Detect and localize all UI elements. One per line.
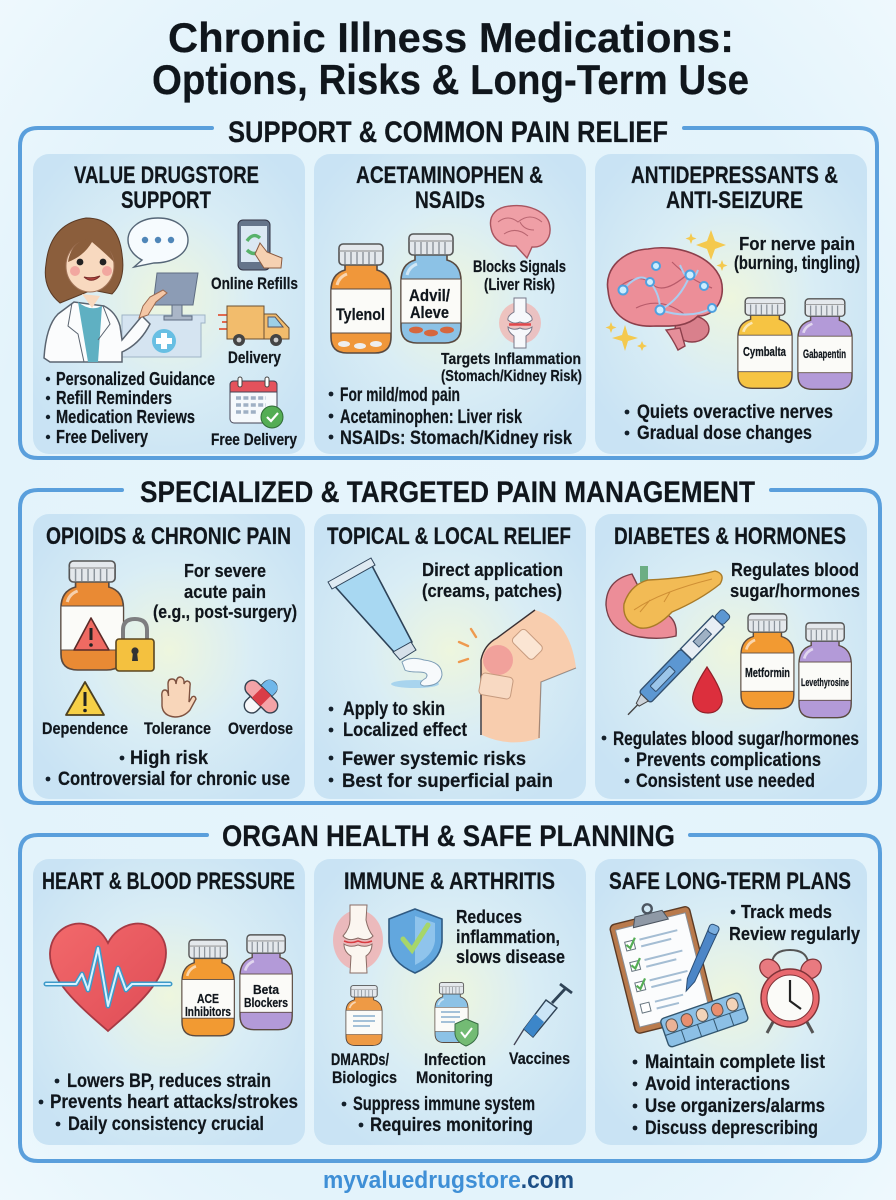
- bullet list: Refill Reminders: [56, 387, 172, 408]
- panel heading: [356, 162, 543, 214]
- icon: Gabapentin bottle: [798, 299, 852, 389]
- bullet list: Use organizers/alarms: [645, 1096, 825, 1117]
- bullet list: [46, 368, 215, 447]
- icon: overdose pills: [241, 677, 281, 716]
- bullet list: [625, 402, 833, 444]
- icon: Levothyroxine bottle: [799, 623, 851, 718]
- bullet list: [39, 1071, 298, 1135]
- bullet list: Consistent use needed: [636, 771, 815, 792]
- label: infection monitoring: Infection: [424, 1051, 486, 1069]
- icon: beta blockers bottle: Beta: [253, 982, 280, 997]
- label: targets inflammation: (Stomach/Kidney Risk): [441, 368, 582, 385]
- icon: Tylenol bottle: Tylenol: [336, 305, 385, 324]
- bullet list: Controversial for chronic use: [58, 769, 290, 790]
- panel heading: NSAIDs: [415, 187, 485, 214]
- icon: brain: [490, 206, 550, 258]
- footer url: myvaluedrugstore.com: [323, 1167, 574, 1194]
- label: delivery: Delivery: [228, 349, 282, 367]
- icon: pill organizer: [660, 992, 749, 1048]
- panel heading: HEART & BLOOD PRESSURE: [42, 868, 295, 895]
- label: tolerance: Tolerance: [144, 720, 211, 738]
- label: blocks signals: [473, 258, 566, 294]
- icon: blood drop: [693, 667, 722, 713]
- panel heading: IMMUNE & ARTHRITIS: [344, 868, 555, 895]
- panel: acetaminophen and NSAIDs: [314, 154, 586, 454]
- label: reduces inflammation: Reduces: [456, 906, 522, 927]
- bullet list: [329, 385, 572, 449]
- icon: Advil and Aleve bottle: Aleve: [410, 303, 449, 322]
- section: organ health and safe planning: [20, 820, 880, 1161]
- icon: brain with nerve signals: [607, 248, 722, 350]
- icon: calendar with check: [230, 377, 283, 428]
- label: reduces inflammation: slows disease: [456, 946, 565, 967]
- icon: tolerance hand: [162, 677, 196, 717]
- bullet list: Personalized Guidance: [56, 368, 215, 389]
- icon: knee with patches: [478, 610, 576, 742]
- label: direct application: [422, 559, 563, 601]
- bullet list: [633, 1052, 826, 1139]
- icon: delivery truck: [218, 306, 289, 346]
- icon: inflamed knee joint: [333, 905, 383, 973]
- bullet list: Medication Reviews: [56, 406, 195, 427]
- label: nerve pain: (burning, tingling): [734, 252, 860, 273]
- bullet list: [602, 729, 859, 792]
- label: regulates blood sugar: sugar/hormones: [730, 580, 860, 601]
- icon: sparkles: [606, 230, 728, 351]
- label: free delivery: Free Delivery: [211, 431, 298, 449]
- section: specialized and targeted pain management: [20, 476, 880, 803]
- bullet list: High risk: [130, 748, 208, 769]
- label: track meds: Track meds: [741, 901, 832, 922]
- panel heading: VALUE DRUGSTORE: [74, 162, 259, 189]
- panel heading: [74, 162, 259, 214]
- icon: Metformin bottle: [741, 614, 794, 709]
- icon: pancreas: [606, 566, 722, 638]
- bullet list: For mild/mod pain: [340, 385, 460, 406]
- bullet list: [329, 699, 553, 792]
- label: overdose: Overdose: [228, 720, 293, 738]
- title: [152, 14, 749, 103]
- bullet list: [342, 1094, 535, 1136]
- label: severe acute pain: (e.g., post-surgery): [153, 601, 297, 622]
- icon: heart with pulse: [46, 924, 170, 1031]
- label: DMARDs and biologics: [331, 1051, 397, 1087]
- bullet list: Best for superficial pain: [342, 771, 553, 792]
- label: regulates blood sugar: Regulates blood: [731, 559, 859, 580]
- bullet list: Free Delivery: [56, 426, 149, 447]
- panel: diabetes and hormones: [595, 514, 867, 799]
- panel: heart and blood pressure: [33, 859, 305, 1145]
- icon: clipboard checklist: [606, 895, 716, 1034]
- bullet list: Daily consistency crucial: [68, 1114, 264, 1135]
- icon: monitoring bottle with shield: [435, 983, 478, 1046]
- label: vaccines: Vaccines: [509, 1050, 570, 1068]
- bullet list: Prevents heart attacks/strokes: [50, 1092, 298, 1113]
- bullet list: Gradual dose changes: [637, 423, 812, 444]
- label: nerve pain: [734, 233, 860, 273]
- panel: safe long-term plans: [595, 859, 867, 1145]
- panel: immune and arthritis: [314, 859, 586, 1145]
- label: track meds: Review regularly: [729, 923, 861, 944]
- panel heading: ANTI-SEIZURE: [666, 187, 803, 214]
- label: severe acute pain: For severe: [184, 560, 266, 581]
- label: blocks signals: Blocks Signals: [473, 258, 566, 276]
- icon: inflamed joint: [499, 298, 541, 348]
- icon: Advil and Aleve bottle: [401, 234, 461, 343]
- section heading: SPECIALIZED & TARGETED PAIN MANAGEMENT: [140, 476, 755, 509]
- icon: pen: [682, 923, 720, 993]
- label: infection monitoring: Monitoring: [416, 1069, 493, 1087]
- bullet list: Discuss deprescribing: [645, 1118, 818, 1139]
- label: infection monitoring: [416, 1051, 493, 1087]
- bullet list: Localized effect: [343, 720, 468, 741]
- label: direct application: Direct application: [422, 559, 563, 580]
- label: regulates blood sugar: [730, 559, 860, 601]
- icon: ACE inhibitors bottle: ACE: [197, 991, 219, 1006]
- section heading: SUPPORT & COMMON PAIN RELIEF: [228, 116, 668, 149]
- panel heading: ACETAMINOPHEN &: [356, 162, 543, 189]
- icon: DMARD bottle: [346, 986, 382, 1046]
- label: nerve pain: For nerve pain: [739, 233, 855, 254]
- bullet list: Fewer systemic risks: [342, 749, 526, 770]
- bullet list: Quiets overactive nerves: [637, 402, 833, 423]
- panel: topical and local relief: [314, 514, 586, 799]
- icon: vaccine syringe: [514, 984, 572, 1045]
- panel heading: [631, 162, 838, 214]
- section: support and common pain relief: [20, 116, 877, 458]
- title: Options, Risks & Long-Term Use: [152, 56, 749, 103]
- icon: pharmacist at counter: [44, 218, 205, 362]
- label: reduces inflammation: inflammation,: [456, 926, 560, 947]
- panel: opioids and chronic pain: [33, 514, 305, 799]
- icon: Levothyroxine bottle: Levethyrosine: [801, 677, 849, 689]
- panel heading: ANTIDEPRESSANTS &: [631, 162, 838, 189]
- panel heading: TOPICAL & LOCAL RELIEF: [327, 523, 571, 550]
- bullet list: Lowers BP, reduces strain: [67, 1071, 271, 1092]
- icon: dependence warning: [66, 682, 104, 715]
- bullet list: NSAIDs: Stomach/Kidney risk: [340, 428, 572, 449]
- bullet list: Prevents complications: [636, 750, 821, 771]
- icon: opioid bottle with warning and lock: [61, 561, 154, 671]
- bullet list: Apply to skin: [343, 699, 445, 720]
- label: severe acute pain: [153, 560, 297, 622]
- label: online refills: Online Refills: [211, 275, 298, 293]
- icon: ACE inhibitors bottle: [182, 940, 234, 1036]
- icon: speech bubble: [128, 218, 188, 267]
- panel heading: OPIOIDS & CHRONIC PAIN: [46, 523, 291, 550]
- label: track meds: [729, 901, 861, 944]
- icon: insulin pen: [622, 607, 732, 720]
- bullet list: Requires monitoring: [370, 1115, 533, 1136]
- icon: Gabapentin bottle: Gabapentin: [803, 349, 846, 361]
- icon: Cymbalta bottle: [738, 298, 792, 388]
- icon: beta blockers bottle: Blockers: [244, 995, 288, 1010]
- section heading: ORGAN HEALTH & SAFE PLANNING: [222, 820, 675, 853]
- panel heading: SUPPORT: [121, 187, 211, 214]
- bullet list: Maintain complete list: [645, 1052, 826, 1073]
- label: blocks signals: (Liver Risk): [484, 276, 555, 294]
- icon: phone refills: [238, 220, 282, 270]
- icon: beta blockers bottle: [240, 935, 292, 1030]
- label: targets inflammation: Targets Inflammation: [441, 351, 581, 368]
- label: dependence: Dependence: [42, 720, 128, 738]
- panel: value drugstore support: [33, 154, 305, 454]
- bullet list: Avoid interactions: [645, 1074, 790, 1095]
- label: direct application: (creams, patches): [422, 580, 562, 601]
- icon: alarm clock: [756, 950, 825, 1033]
- label: severe acute pain: acute pain: [184, 581, 266, 602]
- bullet list: [46, 748, 290, 790]
- bullet list: Acetaminophen: Liver risk: [340, 407, 522, 428]
- icon: shield with check: [389, 909, 442, 973]
- panel: antidepressants and anti-seizure: [595, 154, 867, 454]
- icon: Tylenol bottle: [331, 244, 391, 353]
- icon: ACE inhibitors bottle: Inhibitors: [185, 1004, 231, 1019]
- label: DMARDs and biologics: DMARDs/: [331, 1051, 389, 1069]
- icon: pain lines: [459, 629, 476, 662]
- icon: Advil and Aleve bottle: Advil/: [409, 286, 450, 305]
- title: Chronic Illness Medications:: [168, 14, 734, 61]
- label: reduces inflammation: [456, 906, 565, 967]
- icon: Metformin bottle: Metformin: [745, 666, 790, 680]
- icon: Cymbalta bottle: Cymbalta: [743, 345, 787, 359]
- label: DMARDs and biologics: Biologics: [332, 1069, 397, 1087]
- bullet list: Suppress immune system: [353, 1094, 535, 1115]
- label: targets inflammation: [441, 351, 582, 385]
- icon: cream tube: [328, 558, 442, 688]
